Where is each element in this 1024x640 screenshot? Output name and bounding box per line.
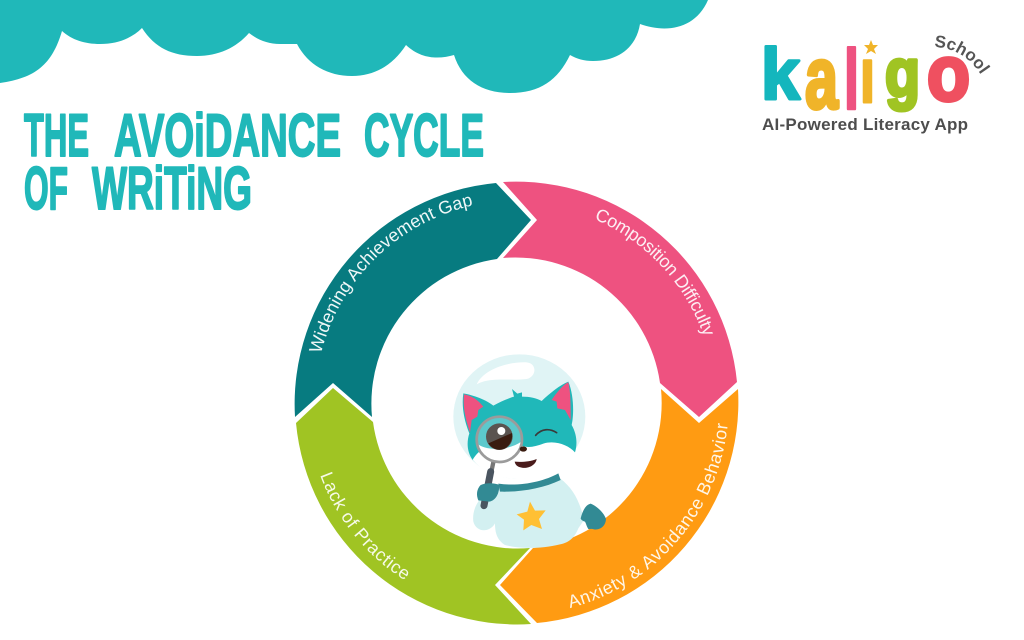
eye highlight (497, 427, 505, 435)
head (472, 435, 575, 479)
logo wordmark: k (761, 35, 801, 115)
logo star (864, 40, 878, 54)
magnifying lens (477, 417, 522, 462)
title: OF (24, 155, 68, 222)
magnifier grip (484, 472, 491, 506)
logo wordmark: i (860, 31, 875, 119)
segment: Lack of Practice: Lack of Practice (320, 472, 408, 579)
logo: Kaligo School (761, 28, 990, 134)
right ear inner (552, 382, 571, 420)
title: THE (24, 102, 89, 169)
cycle ring (294, 182, 738, 624)
right mitten (581, 504, 606, 529)
logo wordmark: g (885, 35, 920, 111)
teal fur (463, 382, 576, 460)
sweater (473, 478, 584, 548)
star on sweater (517, 502, 546, 530)
title: AVOiDANCE (114, 102, 341, 169)
segment: Composition Difficulty (503, 182, 737, 417)
logo: School: School (935, 36, 990, 74)
segment: Widening Achievement Gap (294, 183, 531, 417)
logo wordmark (764, 45, 970, 112)
lens lower white area (477, 442, 521, 462)
eye (486, 423, 513, 450)
logo wordmark: a (805, 28, 839, 127)
mascot: fox astronaut with magnifying glass (453, 354, 606, 548)
segment: Widening Achievement Gap: Widening Achievement Gap (308, 196, 472, 350)
lens ring (477, 417, 522, 462)
wink (536, 430, 557, 435)
paw on handle (477, 483, 499, 502)
eye shadow (488, 433, 512, 450)
collar (498, 473, 561, 492)
helmet (453, 354, 585, 479)
segment: Anxiety & Avoidance Behavior (500, 389, 738, 623)
segment: Composition Difficulty: Composition Difficulty (596, 210, 713, 334)
helmet highlight (477, 362, 534, 384)
segment: Lack of Practice (296, 388, 531, 624)
logo wordmark: o (927, 29, 970, 117)
logo tagline: AI-Powered Literacy App (762, 115, 968, 134)
title (24, 102, 484, 222)
nose (520, 446, 527, 452)
mouth (515, 459, 537, 468)
magnifier handle (491, 462, 493, 475)
segment: Anxiety & Avoidance Behavior: Anxiety & Avoidance Behavior (570, 423, 728, 608)
logo wordmark: l (844, 33, 859, 127)
cloud banner (0, 0, 708, 93)
title: WRiTiNG (92, 155, 252, 222)
title: CYCLE (364, 102, 484, 169)
left ear inner (464, 394, 483, 432)
